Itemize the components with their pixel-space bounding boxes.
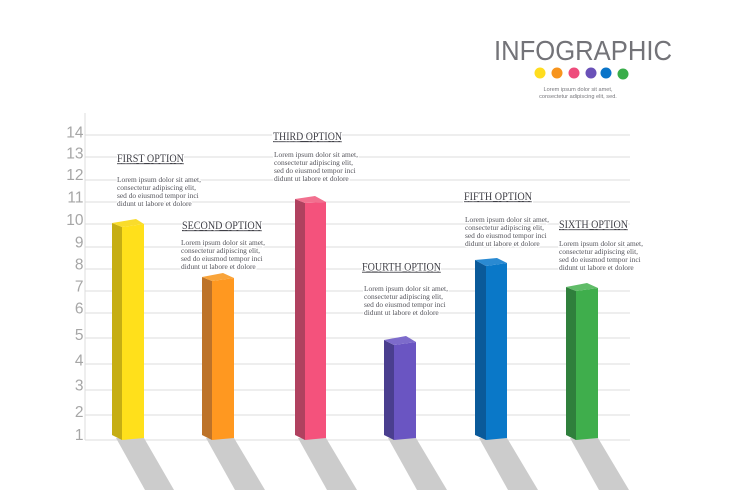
y axis labels: 11 [67, 190, 84, 206]
text: third option: sed do eiusmod tempor inci [274, 166, 356, 175]
text: second option: Lorem ipsum dolor sit amet, [181, 238, 265, 247]
text: first option: Lorem ipsum dolor sit amet, [117, 175, 201, 184]
y axis labels: 7 [75, 278, 84, 296]
heading: first option: FIRST OPTION [117, 153, 185, 165]
text: fifth option: consectetur adipiscing elit, [465, 223, 544, 232]
bar shadows [116, 438, 629, 490]
bar: fourth option [384, 336, 416, 440]
text: sixth option: consectetur adipiscing elit, [559, 247, 638, 256]
text: third option: didunt ut labore et dolore [274, 174, 349, 183]
text: sixth option: sed do eiusmod tempor inci [559, 255, 641, 264]
bar: third option [295, 196, 326, 440]
bar: fifth option [475, 258, 507, 440]
text: second option: sed do eiusmod tempor inci [181, 254, 263, 263]
text: second option: didunt ut labore et dolore [181, 262, 256, 271]
bar: first option [112, 219, 144, 440]
heading: third option: THIRD OPTION [273, 131, 343, 143]
y axis labels: 1 [75, 427, 84, 444]
text: sixth option: didunt ut labore et dolore [559, 263, 634, 272]
text: fifth option: didunt ut labore et dolore [465, 239, 540, 248]
y axis labels: 14 [66, 124, 84, 142]
text: third option: Lorem ipsum dolor sit amet, [274, 150, 358, 159]
y axis labels: 12 [66, 167, 84, 184]
text: third option: consectetur adipiscing elit, [274, 158, 353, 167]
y axis labels: 2 [75, 404, 84, 421]
y axis labels: 13 [66, 146, 84, 162]
text: first option: didunt ut labore et dolore [117, 199, 192, 208]
heading: fifth option: FIFTH OPTION [464, 191, 533, 203]
y axis labels: 6 [75, 300, 84, 318]
title: INFOGRAPHIC [494, 35, 672, 66]
text: first option: sed do eiusmod tempor inci [117, 191, 199, 200]
subtitle: Lorem ipsum dolor sit amet, [543, 87, 613, 93]
text: fourth option: sed do eiusmod tempor inci [364, 300, 446, 309]
text: fifth option: Lorem ipsum dolor sit amet, [465, 215, 549, 224]
bar: sixth option [566, 283, 598, 440]
text: sixth option: Lorem ipsum dolor sit amet, [559, 239, 643, 248]
y axis labels: 8 [75, 256, 84, 274]
legend dots [534, 68, 628, 80]
text: fourth option: didunt ut labore et dolore [364, 308, 439, 317]
y axis labels: 4 [75, 352, 84, 370]
text: second option: consectetur adipiscing elit, [181, 246, 260, 255]
text: fourth option: consectetur adipiscing elit, [364, 292, 443, 301]
heading: fourth option: FOURTH OPTION [362, 262, 442, 274]
y axis labels [66, 124, 84, 444]
bar: second option [202, 273, 234, 440]
y axis labels: 3 [75, 378, 84, 394]
text: fourth option: Lorem ipsum dolor sit amet, [364, 284, 448, 293]
text: fifth option: sed do eiusmod tempor inci [465, 231, 547, 240]
text: first option: consectetur adipiscing elit, [117, 183, 196, 192]
subtitle: consectetur adipiscing elit, sed. [539, 94, 617, 100]
heading: sixth option: SIXTH OPTION [559, 219, 629, 231]
y axis labels: 10 [66, 212, 84, 229]
heading: second option: SECOND OPTION [182, 220, 263, 232]
y axis labels: 9 [75, 234, 84, 252]
y axis labels: 5 [75, 327, 84, 344]
